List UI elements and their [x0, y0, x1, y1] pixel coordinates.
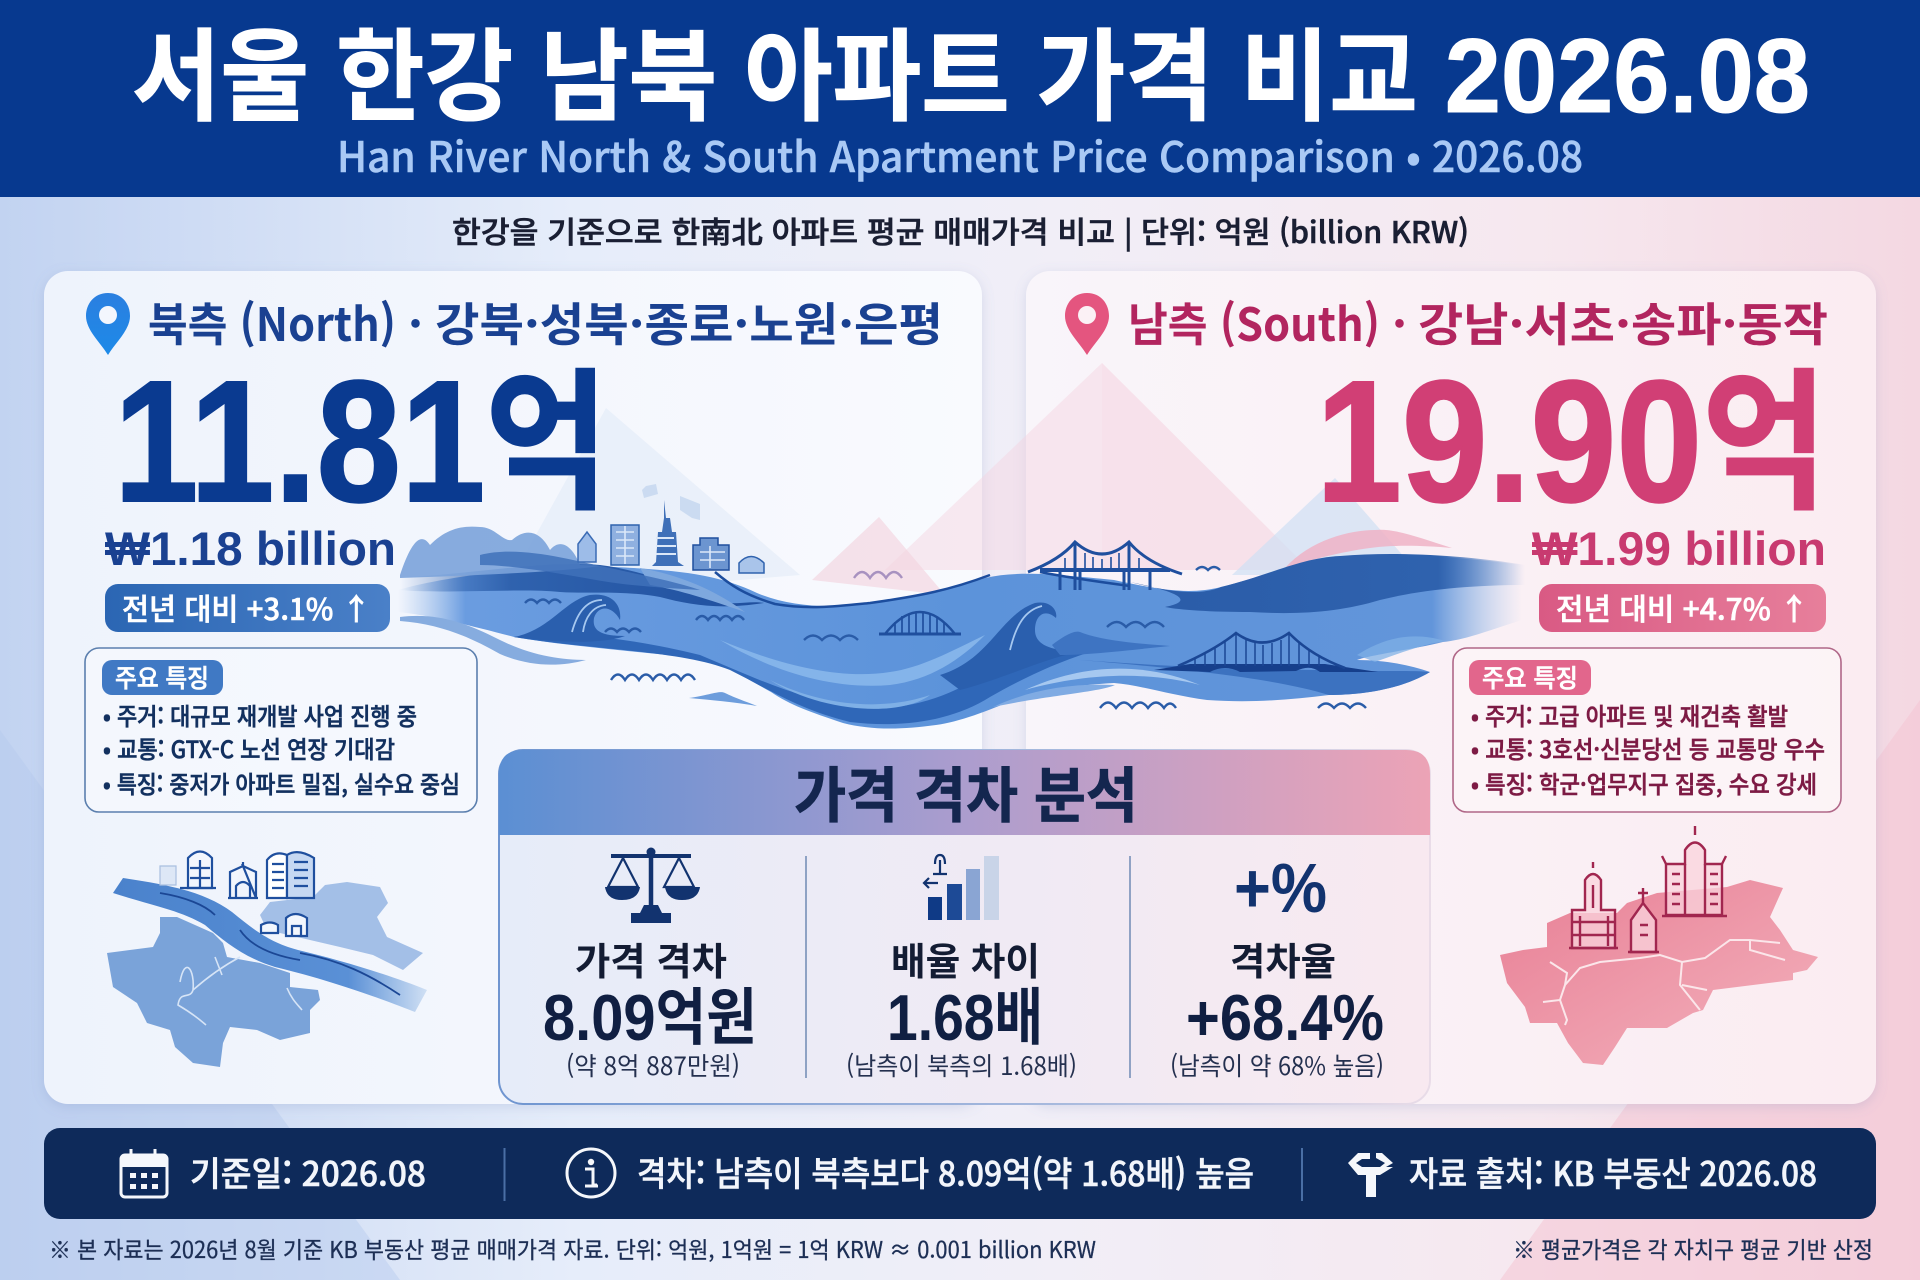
value: price gap: 8.09: [543, 981, 670, 1054]
value: gap rate: +68.4%: [1186, 981, 1384, 1054]
map: buildings: [180, 852, 314, 936]
south: heading: 강남·서초·송파·동작: [1418, 289, 1828, 355]
small water ripples: [525, 567, 1366, 708]
south: price in KRW billion: ₩1.99 billion: [1532, 522, 1826, 575]
skyline: hills: [400, 527, 600, 578]
south: big price: 19.90: [1316, 344, 1749, 538]
label: ratio: 배율 차이: [891, 931, 1040, 986]
panel header gradient: [499, 750, 1430, 835]
icon: bar chart: [924, 855, 999, 920]
subtitle: Han River North & South Apartment Price Comparison • 2026.08: [337, 124, 1583, 185]
footnote: right: ※ 평균가격은 각 자치구 평균 기반 산정: [1513, 1231, 1873, 1265]
north: heading: 강북·성북·종로·노원·은평: [435, 289, 943, 355]
icon: calendar: [121, 1149, 167, 1197]
wave 1: [514, 595, 625, 642]
panel: south background: [1026, 271, 1876, 1104]
column divider: [806, 856, 1130, 1078]
north: big price: 11.81: [114, 344, 537, 538]
note: price gap: (약 8억 887만원): [566, 1047, 740, 1083]
south: key features box: [1453, 648, 1841, 812]
north: price in KRW billion: ₩1.18 billion: [105, 522, 396, 575]
intro line: [452, 208, 1469, 252]
panel: price gap analysis: [499, 748, 1430, 1104]
north: location pin: [86, 293, 130, 355]
label: gap rate: 격차율: [1230, 931, 1336, 986]
icon: signpost: [1348, 1153, 1393, 1197]
icon: balance scale: [605, 848, 700, 923]
south: key features box: • 특징: 학군·업무지구 집중, 수요 강세: [1471, 765, 1817, 800]
north: key features box: • 특징: 중저가 아파트 밀집, 실수요 중심: [103, 765, 460, 800]
south: key features box: 주요 특징: [1482, 659, 1578, 695]
footer: data source: 자료 출처: KB 부동산 2026.08: [1409, 1147, 1817, 1196]
intro line: 한강을 기준으로 한南北 아파트 평균 매매가격 비교: [452, 208, 1115, 252]
icon: plus percent: +%: [1234, 849, 1327, 927]
bridge: upper suspension: [1028, 542, 1182, 590]
south: heading: [1128, 289, 1828, 355]
note: ratio: (남측이 북측의 1.68배): [846, 1047, 1077, 1083]
north: key features box: • 교통: GTX-C 노선 연장 기대감: [103, 730, 395, 765]
panel: north background: [44, 271, 982, 1104]
bridge: lower suspension: [1154, 633, 1378, 672]
illustration: Han River: [398, 484, 1525, 729]
footer info bar: [44, 1128, 1876, 1219]
footnote: left: ※ 본 자료는 2026년 8월 기준 KB 부동산 평균 매매가격 자료. 단위: 억원, 1억원 = 1억 KRW ≈ 0.001 billion KRW: [49, 1231, 1096, 1265]
north: key features box: 주요 특징: [115, 659, 209, 695]
river: light stream: [720, 635, 985, 686]
value: ratio: 1.68: [887, 981, 1014, 1054]
south: location pin: [1065, 293, 1109, 355]
map: upper district: [260, 882, 423, 970]
footer: gap summary: 격차: 남측이 북측보다 8.09억(약 1.68배) 높음: [637, 1147, 1254, 1196]
wave 2: [940, 602, 1078, 690]
river: north bank dark band: [400, 564, 764, 606]
mountains behind the river: [500, 363, 1452, 600]
river: south bank dark band: [1130, 554, 1525, 613]
north: map of districts: [107, 852, 427, 1067]
north: heading: ·: [408, 289, 423, 355]
north: heading: 북측 (North): [148, 289, 396, 355]
value: ratio: 배: [995, 984, 1043, 1053]
river: top edge line: [715, 572, 1130, 607]
panel heading: 가격 격차 분석: [794, 748, 1138, 835]
south: heading: 남측 (South): [1128, 289, 1380, 355]
north: year-over-year badge: 전년 대비 +3.1% ↑: [122, 585, 371, 629]
south: year-over-year badge: 전년 대비 +4.7% ↑: [1556, 585, 1809, 629]
north: heading: [148, 289, 943, 355]
map: buildings: [1569, 826, 1727, 952]
south: heading: ·: [1392, 289, 1407, 355]
north: key features box: [85, 648, 477, 812]
map: district shape: [1500, 880, 1818, 1065]
map: internal rivers: [1543, 940, 1785, 1025]
south: key features box: • 주거: 고급 아파트 및 재건축 활발: [1471, 697, 1788, 732]
icon: info: [567, 1149, 615, 1197]
south: big price: 억: [1702, 359, 1827, 529]
south: map of districts: [1500, 826, 1818, 1065]
label: price gap: 가격 격차: [575, 931, 727, 986]
value: price gap: 억원: [656, 984, 757, 1053]
map: river: [113, 878, 427, 1012]
skyline: buildings: [578, 532, 596, 562]
bridge: small arch: [879, 612, 961, 634]
header band: [0, 0, 1920, 197]
map: lower district: [107, 917, 320, 1067]
north: key features box: • 주거: 대규모 재개발 사업 진행 중: [103, 697, 417, 732]
river: base water: [398, 555, 1522, 729]
south: key features box: • 교통: 3호선·신분당선 등 교통망 우수: [1471, 730, 1825, 765]
intro line: | 단위: 억원 (billion KRW): [1124, 208, 1469, 252]
footer: reference date: 기준일: 2026.08: [190, 1147, 426, 1196]
title: 서울 한강 남북 아파트 가격 비교 2026.08: [132, 0, 1810, 141]
river: lower dark stream: [514, 635, 1090, 724]
note: gap rate: (남측이 약 68% 높음): [1170, 1047, 1384, 1083]
north: big price: 억: [485, 359, 608, 529]
river: pale wisps: [400, 616, 586, 665]
panel body: [499, 750, 1430, 1104]
